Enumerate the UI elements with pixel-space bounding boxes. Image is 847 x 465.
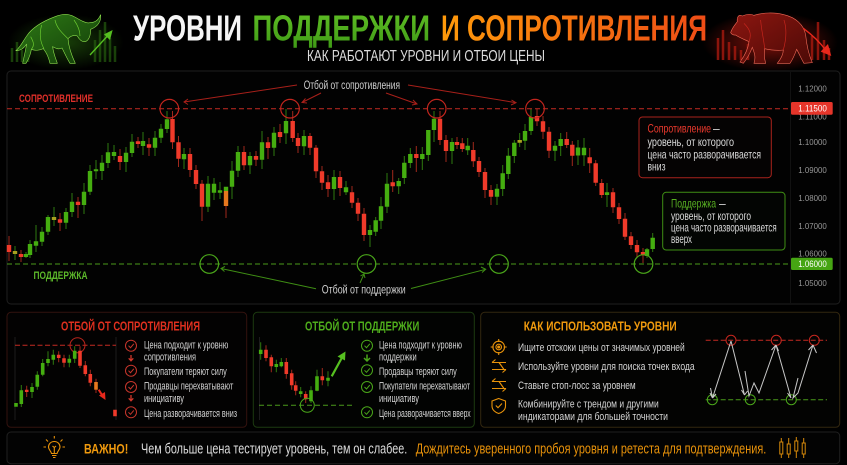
callout: support: Поддержка bbox=[671, 196, 716, 210]
note text: Чем больше цена тестирует уровень, тем он слабее. bbox=[141, 442, 407, 458]
title bbox=[133, 8, 707, 48]
checklist text: сопротивления bbox=[144, 351, 196, 363]
callout: support bbox=[663, 192, 785, 250]
mini chart: resistance bounce bbox=[15, 337, 116, 420]
title: УРОВНИ bbox=[133, 8, 242, 48]
checklist text: инициативу bbox=[379, 393, 419, 405]
icon: arrows stop-loss bbox=[492, 378, 506, 392]
checklist icons bbox=[362, 340, 372, 418]
price badge: support bbox=[791, 258, 833, 270]
checklist text: инициативу bbox=[144, 393, 184, 405]
checklist text: Цена подходит к уровню bbox=[379, 339, 462, 351]
tips text: Ищите отскоки цены от значимых уровней bbox=[518, 342, 685, 354]
price axis labels: 1.06000 bbox=[798, 248, 827, 258]
checklist text: Цена подходит к уровню bbox=[144, 339, 228, 351]
resistance level: СОПРОТИВЛЕНИЕ bbox=[19, 93, 93, 105]
resistance circles bbox=[160, 99, 544, 118]
subtitle: КАК РАБОТАЮТ УРОВНИ И ОТБОИ ЦЕНЫ bbox=[307, 48, 545, 65]
price axis labels: 1.08000 bbox=[798, 193, 827, 203]
price axis labels: 1.12000 bbox=[798, 84, 827, 94]
support circles bbox=[200, 255, 653, 273]
icon: bull bbox=[8, 14, 124, 70]
callout: resistance bbox=[639, 117, 771, 178]
price badge: resistance bbox=[791, 102, 833, 115]
price axis labels bbox=[798, 84, 827, 288]
checklist text bbox=[144, 339, 237, 420]
annotation: resistance bounce bbox=[184, 80, 516, 105]
annotation: support bounce: Отбой от поддержки bbox=[322, 284, 406, 296]
panel: how to use levels bbox=[481, 312, 840, 427]
icon: bear bbox=[702, 12, 838, 72]
callout: resistance: – bbox=[713, 121, 720, 135]
tips text: Используйте уровни для поиска точек входа bbox=[518, 361, 695, 373]
tips text: Комбинируйте с трендом и другими bbox=[518, 398, 659, 410]
support level: ПОДДЕРЖКА bbox=[34, 270, 88, 282]
icon: target bbox=[491, 339, 507, 355]
callout: resistance: вниз bbox=[648, 160, 666, 174]
annotation: support bounce bbox=[221, 266, 486, 296]
note label: ВАЖНО! bbox=[84, 441, 128, 457]
callout: resistance: уровень, от которого bbox=[648, 135, 734, 149]
checklist text: Покупатели теряют силу bbox=[144, 366, 227, 378]
checklist text: Цена разворачивается вверх bbox=[379, 408, 471, 420]
icon: arrows exchange bbox=[492, 360, 506, 372]
price axis labels: 1.10000 bbox=[798, 137, 827, 147]
tips text bbox=[518, 342, 695, 423]
mini chart: support bounce bbox=[259, 337, 353, 420]
checklist text: поддержки bbox=[379, 351, 417, 363]
tips text: Ставьте стоп-лосс за уровнем bbox=[518, 380, 636, 392]
price badge: support: 1.06000 bbox=[798, 259, 827, 269]
panel heading: ОТБОЙ ОТ ПОДДЕРЖКИ bbox=[305, 318, 419, 334]
icon: shield bbox=[492, 398, 506, 414]
panel: support bounce bbox=[253, 312, 474, 427]
checklist text: Покупатели перехватывают bbox=[379, 381, 470, 393]
panel heading: КАК ИСПОЛЬЗОВАТЬ УРОВНИ bbox=[524, 320, 677, 334]
icon: light bulb bbox=[44, 436, 65, 458]
callout: resistance: цена часто разворачивается bbox=[648, 147, 761, 161]
price badge: resistance: 1.11500 bbox=[798, 104, 827, 114]
icon: candles bbox=[780, 437, 805, 458]
candlestick chart bbox=[9, 109, 653, 263]
title: И СОПРОТИВЛЕНИЯ bbox=[441, 8, 707, 48]
title: ПОДДЕРЖКИ bbox=[252, 8, 430, 48]
callout: support: вверх bbox=[671, 232, 692, 246]
important note bar bbox=[7, 432, 840, 464]
panel: resistance bounce bbox=[7, 312, 247, 427]
price axis labels: 1.05000 bbox=[798, 278, 827, 288]
checklist text bbox=[379, 339, 471, 420]
price axis labels: 1.07000 bbox=[798, 221, 827, 231]
annotation: resistance bounce: Отбой от сопротивления bbox=[304, 80, 400, 92]
panel heading: ОТБОЙ ОТ СОПРОТИВЛЕНИЯ bbox=[61, 318, 200, 334]
price axis labels: 1.11000 bbox=[798, 111, 827, 121]
checklist icons bbox=[126, 340, 136, 418]
callout: support: уровень, от которого bbox=[671, 209, 751, 223]
callout: resistance: Сопротивление bbox=[648, 121, 711, 135]
tips text: индикаторами для большей точности bbox=[518, 411, 668, 423]
checklist text: Цена разворачивается вниз bbox=[144, 408, 237, 420]
callout: support: – bbox=[719, 196, 726, 210]
checklist text: Продавцы теряют силу bbox=[379, 366, 457, 378]
price axis labels: 1.09000 bbox=[798, 165, 827, 175]
panel: main chart bbox=[7, 71, 840, 304]
diagram: bounces between levels bbox=[706, 335, 827, 405]
checklist text: Продавцы перехватывают bbox=[144, 381, 233, 393]
callout: support: цена часто разворачивается bbox=[671, 220, 777, 234]
